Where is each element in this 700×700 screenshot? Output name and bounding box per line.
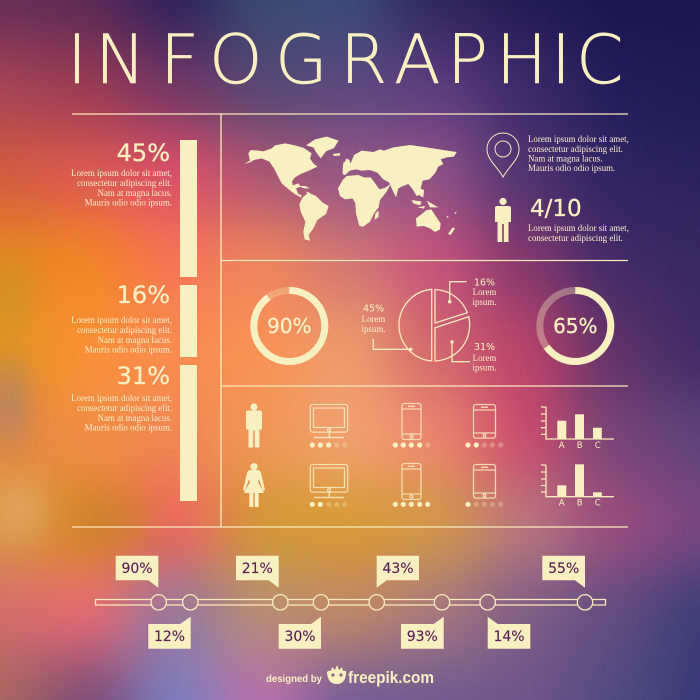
location text: Mauris odio odio ipsum. [528,163,615,173]
stat 16% text [71,315,172,354]
timeline nodes [151,595,593,610]
icon: phone with usage dots [393,404,430,448]
bar chart: men: A [559,441,565,451]
callout 14% [488,617,530,649]
stat 45% text: Nam at magna lacus. [98,188,172,198]
bar chart: women: C [595,498,601,508]
callout 90% [116,556,158,588]
stat 45% text [71,168,172,208]
callout 16% [448,278,496,307]
stat 31% bar [180,365,197,501]
stat 45% value: 45% [117,139,170,167]
stat 31% text: Nam at magna lacus. [98,413,172,423]
donut chart 65% [540,290,611,362]
stat 31% value: 31% [117,362,170,390]
icon: woman [243,463,265,507]
stat 31% text: Mauris odio odio ipsum. [85,422,172,432]
callout 16%: 16% [474,278,495,288]
callout 14%: 14% [493,629,525,645]
callout 30%: 30% [284,629,316,645]
callout 45%: 45% [363,304,384,315]
callout 21% [236,556,279,588]
panel: left percentage column [71,139,197,501]
stat 16% text: Mauris odio odio ipsum. [85,344,172,354]
stat 16% text: Nam at magna lacus. [98,335,172,345]
pie chart [362,278,496,372]
callout 45%: Lorem [362,314,385,324]
callout 55%: 55% [548,561,579,577]
layout dividers [72,114,628,527]
callout 93%: 93% [407,629,438,645]
bar chart: men: B [577,441,583,451]
icon: tablet with usage dots [465,404,503,448]
callout 45%: ipsum. [362,324,385,334]
donut chart 65%: 65% [553,314,598,338]
icon: monitor with usage dots [310,464,348,507]
stat 31% text: Lorem ipsum dolor sit amet, [71,393,172,403]
stat 45% bar [180,140,197,277]
bar chart: women [541,464,614,508]
callout 21%: 21% [242,561,273,577]
icon: person [495,198,511,242]
world map [244,137,457,241]
icon: phone with usage dots [393,464,430,507]
icon: freepik logo [327,665,346,684]
callout 31%: Lorem [473,353,496,363]
location text: consectetur adipiscing elit. [528,144,623,154]
bar chart: men: C [595,441,601,451]
stat 31% text [71,393,172,432]
stat 4/10 text [528,223,629,243]
callout 31%: 31% [474,342,495,353]
footer credit: freepik.com [348,669,434,687]
timeline track [96,600,606,605]
stat 4/10: 4/10 [530,196,582,222]
stat 16% value: 16% [117,281,170,309]
callout 43% [377,556,419,588]
stat 16% text: Lorem ipsum dolor sit amet, [71,315,172,325]
callout 16%: ipsum. [473,297,496,307]
device row: women [310,464,503,507]
callout 90%: 90% [121,561,153,577]
callout 43%: 43% [382,561,414,577]
donut chart 90% [254,290,325,362]
callout 93% [401,617,444,649]
stat 45% text: consectetur adipiscing elit. [77,178,172,188]
bar chart: women: A [559,498,565,508]
stat 31% text: consectetur adipiscing elit. [77,403,172,413]
callout 31% [450,340,496,372]
bar chart: women: B [577,498,583,508]
timeline [96,556,606,649]
location text: Nam at magna lacus. [528,154,602,164]
footer credit: designed by [266,673,322,685]
stat 16% bar [180,285,197,357]
callout 30% [279,617,321,649]
location text [528,134,629,173]
icon: location pin [487,133,519,177]
title: INFOGRAPHIC [67,21,623,100]
icon: man [246,403,262,448]
callout 12% [148,617,191,649]
callout 12%: 12% [154,629,185,645]
icon: tablet with usage dots [465,464,503,507]
stat 4/10 text: consectetur adipiscing elit. [528,233,623,243]
callout 16%: Lorem [473,287,496,297]
icon: monitor with usage dots [310,404,348,448]
bar chart: men [541,407,614,451]
callout 55% [542,556,585,588]
callout 31%: ipsum. [473,362,496,372]
stat 45% text: Mauris odio odio ipsum. [85,198,172,208]
donut chart 90%: 90% [267,314,312,338]
device row: men [310,404,503,448]
location text: Lorem ipsum dolor sit amet, [528,134,629,144]
stat 16% text: consectetur adipiscing elit. [77,325,172,335]
stat 45% text: Lorem ipsum dolor sit amet, [71,168,172,178]
footer credit [266,665,434,687]
callout 45% [362,304,412,351]
stat 4/10 text: Lorem ipsum dolor sit amet, [528,223,629,233]
